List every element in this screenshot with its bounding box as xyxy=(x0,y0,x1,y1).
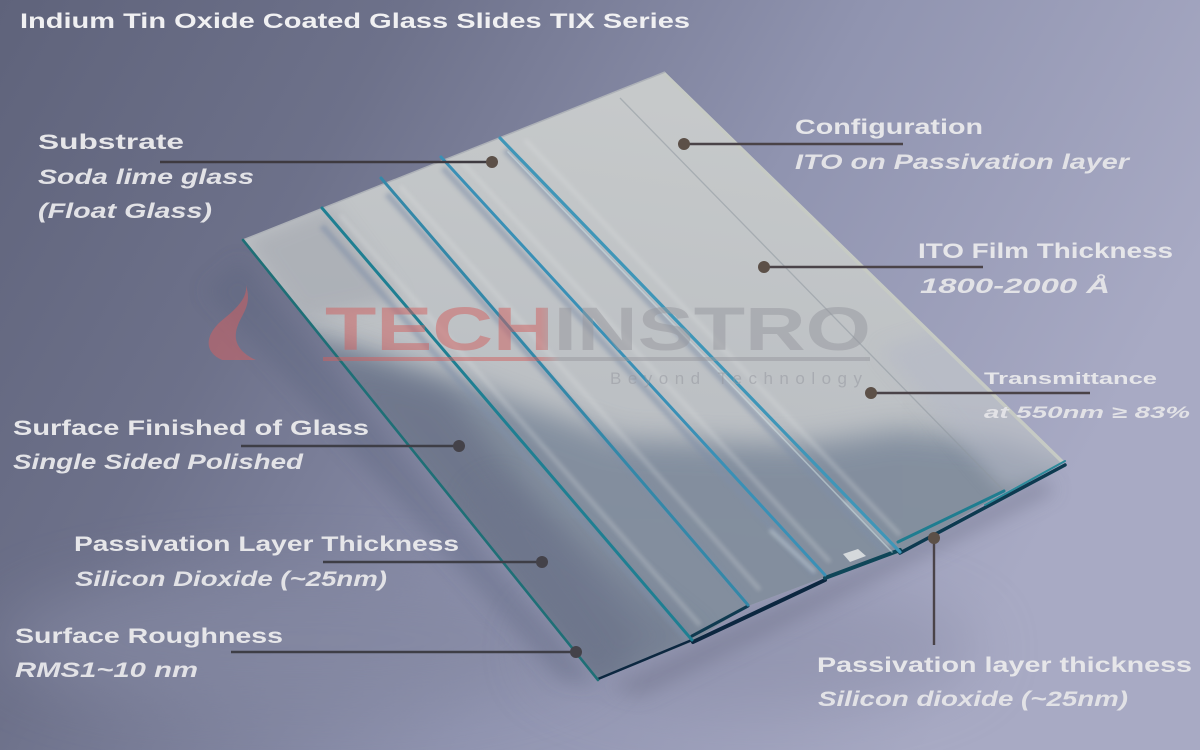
bottom dark edges xyxy=(598,461,1065,679)
callout: ITO film thickness xyxy=(758,240,1173,298)
callout: transmittance: Transmittance xyxy=(984,369,1157,388)
callout: passivation layer thickness left: Silicon Dioxide (~25nm) xyxy=(75,568,387,591)
callout: substrate xyxy=(38,131,498,223)
callout: transmittance xyxy=(865,369,1190,422)
white striations near slide tips xyxy=(770,500,890,572)
glass body xyxy=(244,72,1040,632)
flame icon xyxy=(209,285,256,360)
callout: surface roughness xyxy=(15,625,582,682)
slide shadows xyxy=(252,306,1052,696)
callout: configuration xyxy=(678,116,1131,174)
watermark: Techinstro logo: Beyond Technology xyxy=(610,369,868,388)
glass slide stack photograph xyxy=(205,72,1090,700)
watermark: Techinstro logo: TECHINSTRO xyxy=(325,295,871,363)
glass shading xyxy=(230,72,1090,700)
callout: ITO film thickness: ITO Film Thickness xyxy=(918,240,1173,263)
callout: passivation layer thickness right: Passivation layer thickness xyxy=(817,654,1192,677)
callout: substrate: (Float Glass) xyxy=(38,200,212,223)
top rim xyxy=(243,72,665,240)
callout: surface roughness: Surface Roughness xyxy=(15,625,283,648)
chipped glass mark xyxy=(843,549,866,562)
callout: passivation layer thickness left xyxy=(74,533,548,591)
callout: passivation layer thickness right xyxy=(817,532,1192,711)
callout: surface finish xyxy=(13,417,465,474)
callout: substrate: Soda lime glass xyxy=(38,166,254,189)
callout: ITO film thickness: 1800-2000 Å xyxy=(920,274,1110,298)
callout: passivation layer thickness right: Silicon dioxide (~25nm) xyxy=(818,688,1128,711)
watermark: Techinstro logo xyxy=(209,285,871,388)
callout: substrate: Substrate xyxy=(38,131,184,154)
title: Indium Tin Oxide Coated Glass Slides TIX Series xyxy=(20,10,690,33)
callout: configuration: ITO on Passivation layer xyxy=(795,151,1131,174)
callout: surface roughness: RMS1~10 nm xyxy=(15,659,198,682)
callout: transmittance: at 550nm ≥ 83% xyxy=(984,403,1190,422)
teal slide edges xyxy=(243,138,900,680)
callout: passivation layer thickness left: Passivation Layer Thickness xyxy=(74,533,459,556)
callout: surface finish: Single Sided Polished xyxy=(13,451,305,474)
callout: surface finish: Surface Finished of Glass xyxy=(13,417,369,440)
callout: configuration: Configuration xyxy=(795,116,983,139)
